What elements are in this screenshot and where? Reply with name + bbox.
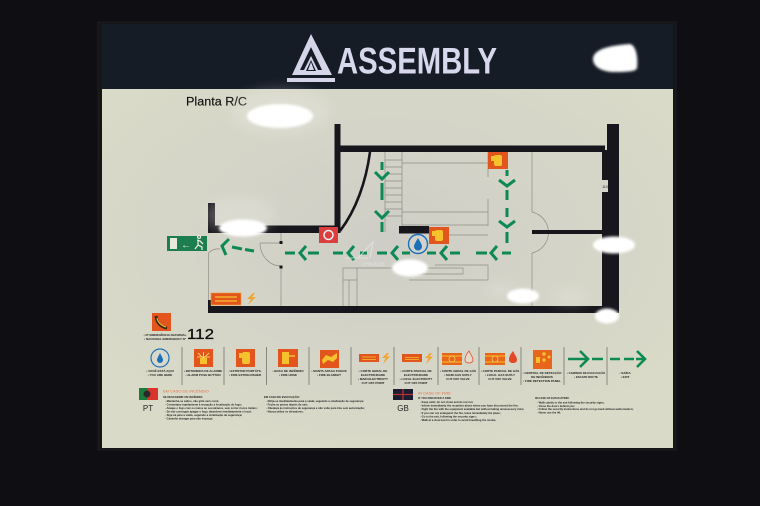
emergency label: • Nº EMERGÊNCIA NACIONAL bbox=[144, 332, 187, 337]
wall marker bbox=[602, 180, 608, 192]
GB fire steps bbox=[418, 396, 524, 422]
legend: fire hose: • FIRE HOSE bbox=[279, 373, 297, 377]
legend: local gas cut-off: • CORTE PARCIAL DE GÁS bbox=[481, 368, 519, 373]
GB fire steps: - Inform immediately the reception about where you have discovered the fire; bbox=[420, 404, 519, 408]
door posts bbox=[280, 241, 282, 268]
legend: you are here: • VOCÊ ESTÁ AQUI bbox=[146, 368, 174, 373]
PT evacuation steps: - Obedeça às instruções de segurança e não volte para trás sem autorização; bbox=[266, 406, 365, 410]
PT fire steps: - Se não conseguir apagar o fogo, abandone imediatamente o local; bbox=[165, 410, 252, 414]
legend: escape route: • ESCAPE ROUTE bbox=[574, 375, 598, 379]
escape route arrows bbox=[222, 162, 515, 260]
PT fire steps: - Caminhe devagar para não tropeçar. bbox=[165, 416, 213, 420]
PT fire steps bbox=[163, 394, 258, 420]
flag GB bbox=[393, 389, 413, 400]
icon: phone bbox=[152, 313, 171, 331]
legend: local electricity cut-off: ELECTRICIDADE bbox=[404, 373, 428, 377]
thin interior lines bbox=[208, 152, 548, 306]
header band bbox=[102, 24, 673, 89]
logo wordmark: ASSEMBLY bbox=[337, 40, 497, 82]
legend: fire blanket: • FIRE BLANKET bbox=[317, 373, 341, 377]
legend: fire blanket: • MANTA APAGA FOGOS bbox=[311, 369, 347, 373]
legend: alarm button: • ALARM PUSH BUTTON bbox=[185, 373, 221, 377]
legend: fire detection panel: • FIRE DETECTION PANEL bbox=[523, 379, 561, 383]
GB fire steps: IF YOU DISCOVER A FIRE bbox=[418, 396, 451, 400]
legend: fire hose: • BOCA DE INCÊNDIO bbox=[272, 368, 304, 373]
flag PT bbox=[139, 388, 158, 400]
legend: local gas cut-off bbox=[481, 351, 519, 381]
legend: fire detection panel: • CENTRAL DE DETECÇÃO bbox=[523, 370, 562, 375]
legend: alarm button bbox=[184, 349, 222, 377]
legend: main gas cut-off: • MAIN GAS SUPLY bbox=[444, 373, 472, 377]
PT evacuation steps: EM CASO DE EVACUAÇÃO: bbox=[264, 394, 300, 399]
exit sign: ← bbox=[181, 240, 191, 251]
legend: main electricity cut-off: ELECTRICIDADE bbox=[361, 373, 385, 377]
legend: main gas cut-off bbox=[440, 351, 476, 381]
exit sign bbox=[167, 236, 207, 251]
PT evacuation steps: - Nunca utilize os elevadores. bbox=[266, 410, 304, 414]
you are here marker bbox=[408, 234, 428, 254]
legend: you are here bbox=[146, 349, 174, 377]
PT fire steps: - Siga na para a saída, seguindo a sinalização de segurança; bbox=[165, 413, 242, 417]
watermark: THEAGE bbox=[361, 262, 386, 268]
GB evacuation steps: - Close the doors behind you; bbox=[537, 404, 575, 408]
PT fire steps: SE DESCOBRIR UM INCÊNDIO: bbox=[163, 394, 203, 399]
English instructions bbox=[393, 389, 634, 422]
legend: fire hose bbox=[272, 349, 304, 377]
legend: you are here: • YOU ARE HERE bbox=[148, 373, 172, 377]
legend: main electricity cut-off: • CORTE GERAL DE bbox=[359, 369, 387, 373]
legend: local electricity cut-off: • CORTE PARCIAL DE bbox=[400, 369, 432, 373]
legend: main gas cut-off: CUT OFF VALVE bbox=[446, 377, 470, 381]
GB evacuation steps: - Never use the lift. bbox=[537, 410, 561, 414]
legend: escape route: • CAMINHO DE EVACUAÇÃO bbox=[567, 370, 606, 375]
legend: main electricity cut-off: CUT OFF POINT bbox=[362, 381, 385, 385]
light reflections bbox=[205, 44, 637, 324]
GB fire steps: - If you can not extinguish the fire, leave immediately the place; bbox=[420, 411, 501, 415]
cream plan panel bbox=[102, 89, 673, 448]
GB fire steps: - Walk at a slow level in order to avoid breathing the smoke. bbox=[420, 418, 496, 422]
PT heading: EM CASO DE INCÊNDIO bbox=[163, 388, 209, 394]
emergency label bbox=[144, 332, 187, 341]
legend: exit bbox=[610, 351, 645, 379]
Portuguese instructions bbox=[139, 388, 365, 420]
PT evacuation steps: - Feche as portas depois de sair; bbox=[266, 402, 308, 406]
GB fire steps: - Keep calm; do not shout and do not run; bbox=[420, 400, 474, 404]
legend: local electricity cut-off: CUT OFF POINT bbox=[404, 381, 428, 385]
legend: exit: • EXIT bbox=[621, 375, 629, 379]
emergency label: • NACIONAL EMERGENCY Nº bbox=[144, 337, 187, 341]
PT evacuation steps: - Dirija-se imediatamente para a saída, seguindo a sinalização de segurança; bbox=[266, 399, 364, 403]
logo mark bbox=[287, 34, 335, 82]
legend: escape route bbox=[567, 351, 606, 379]
GB fire steps: - Fight the fire with the equipment available but without taking unnecessary risks; bbox=[420, 407, 524, 411]
GB fire steps: - Go to the exit, following the security signs; bbox=[420, 414, 477, 418]
GB evacuation steps bbox=[535, 396, 634, 414]
legend: extinguisher: • EXTINTOR PORTÁTIL bbox=[229, 368, 262, 373]
alarm button bbox=[319, 227, 338, 243]
PT fire steps: - Mantenha-se calmo, não grite nem corra; bbox=[165, 399, 219, 403]
legend bbox=[146, 347, 645, 385]
PT code: PT bbox=[143, 404, 153, 413]
walls bbox=[208, 124, 619, 313]
legend: local electricity cut-off: • LOCAL ELECTRICITY bbox=[400, 377, 432, 381]
legend: main gas cut-off: • CORTE GERAL DE GÁS bbox=[440, 368, 476, 373]
legend: alarm button: • BOTONEIRA DE ALARME bbox=[184, 369, 222, 373]
legend: main electricity cut-off: • MAIN ELECTRICITY bbox=[358, 377, 388, 381]
legend: local electricity cut-off bbox=[400, 353, 433, 385]
floor plan bbox=[167, 124, 619, 313]
legend: fire detection panel bbox=[523, 350, 562, 383]
number 112: 112 bbox=[187, 326, 214, 343]
legend: exit: • SAÍDA bbox=[619, 370, 631, 375]
legend: fire detection panel: DE INCÊNDIOS bbox=[531, 374, 553, 379]
curved stair wall bbox=[340, 152, 370, 231]
emergency number bbox=[144, 313, 214, 343]
glass sheet bbox=[98, 22, 676, 450]
extinguisher upper bbox=[488, 152, 508, 169]
legend: main electricity cut-off bbox=[358, 353, 390, 385]
main electricity cut-off bbox=[211, 293, 256, 305]
legend: extinguisher bbox=[229, 349, 262, 377]
PT evacuation steps bbox=[264, 394, 365, 414]
PT fire steps: - Comunique rapidamente à recepção a localização do fogo; bbox=[165, 402, 242, 406]
extinguisher lower bbox=[429, 227, 449, 244]
GB evacuation steps: IN CASE OF EVACUATION: bbox=[535, 396, 569, 400]
GB evacuation steps: - Walk calmly to the exit following the security signs; bbox=[537, 400, 605, 404]
legend: local gas cut-off: CUT OFF VALVE bbox=[488, 377, 512, 381]
watermark bbox=[345, 242, 386, 268]
GB heading: IN CASE OF FIRE bbox=[418, 390, 451, 396]
GB evacuation steps: - Follow the security instructions and do not go back without authorisation; bbox=[537, 407, 634, 411]
GB code: GB bbox=[397, 404, 409, 413]
legend: local gas cut-off: • LOCAL GAS SUPLY bbox=[485, 373, 515, 377]
legend: extinguisher: • FIRE EXTINGUISHER bbox=[229, 373, 262, 377]
PT fire steps: - Ataque o fogo com os meios ao seu alcance, sem correr riscos inúteis; bbox=[165, 406, 258, 410]
floor label: Planta R/C bbox=[186, 96, 247, 108]
wall marker: 110 bbox=[602, 185, 608, 189]
legend: fire blanket bbox=[311, 350, 347, 377]
